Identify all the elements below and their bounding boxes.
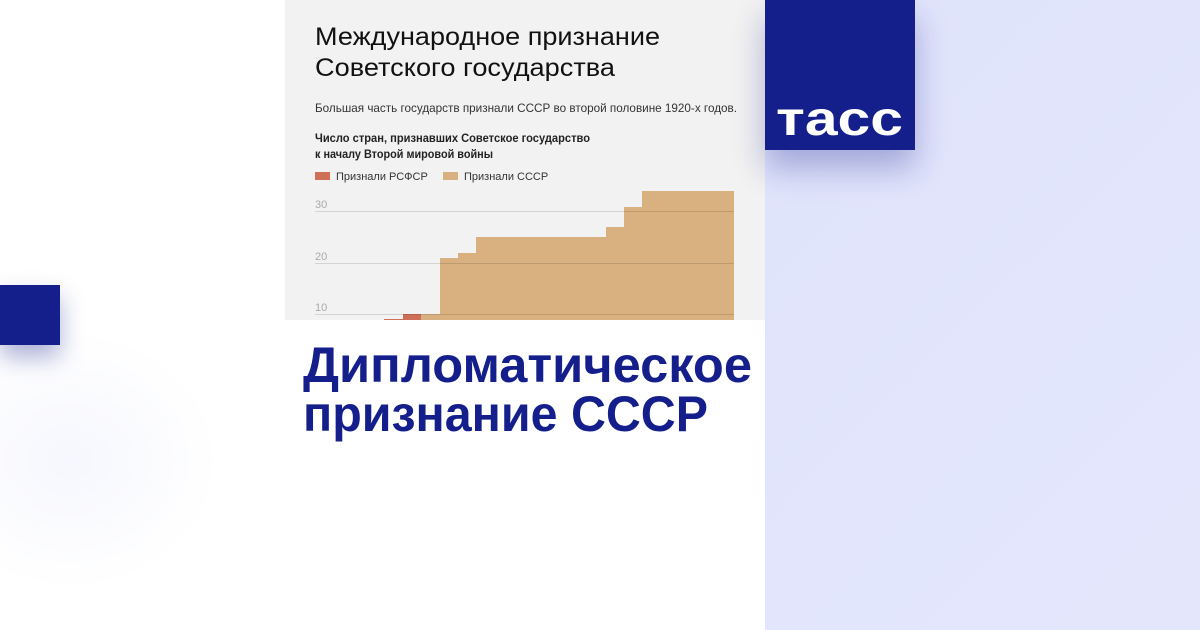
legend: Признали СССР — [464, 171, 548, 183]
headline: Дипломатическое — [303, 338, 752, 393]
infographic preview panel — [285, 0, 765, 320]
chart title: к началу Второй мировой войны — [315, 147, 493, 161]
TASS logo: тасс — [776, 93, 903, 146]
left blue square — [0, 285, 60, 345]
left soft glow — [0, 330, 220, 590]
headline: признание СССР — [303, 386, 708, 442]
preview title: Международное признание — [315, 23, 660, 51]
legend: Признали РСФСР — [336, 171, 428, 183]
headline — [303, 338, 752, 442]
chart title: Число стран, признавших Советское государство — [315, 131, 590, 145]
preview title: Советского государства — [315, 54, 615, 82]
right background panel — [765, 0, 1200, 630]
step area chart — [315, 191, 734, 321]
step area chart: 30 — [315, 199, 327, 211]
chart title — [315, 131, 590, 161]
preview subtitle: Большая часть государств признали СССР во второй половине 1920-х годов. — [315, 101, 737, 115]
preview title — [315, 23, 660, 82]
step area chart: 20 — [315, 251, 327, 263]
legend — [315, 171, 548, 183]
TASS logo — [765, 0, 915, 150]
step area chart: 10 — [315, 302, 327, 314]
